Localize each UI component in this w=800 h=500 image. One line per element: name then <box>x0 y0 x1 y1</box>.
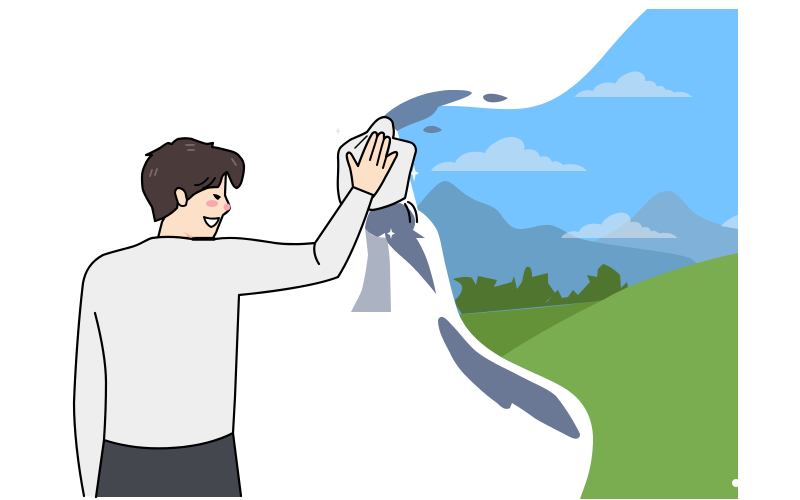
trouser side lines <box>96 433 241 496</box>
sleeve inner line <box>95 313 106 440</box>
hair fringe lines <box>195 178 215 188</box>
cloud: small overlapping mountain <box>561 213 677 238</box>
motion lines <box>405 202 417 222</box>
sky <box>380 9 738 499</box>
neck and face <box>158 170 230 238</box>
white dot <box>732 479 740 487</box>
hill: dark green <box>459 300 602 364</box>
cheek blush <box>206 200 218 207</box>
mouth <box>204 217 219 227</box>
ear <box>175 188 187 206</box>
cloud: upper right <box>575 71 692 97</box>
cloud: far right <box>721 215 738 229</box>
splash: grey drip <box>351 228 391 312</box>
sweater <box>74 187 373 497</box>
hill: light green <box>500 253 738 499</box>
trousers <box>96 433 241 497</box>
hand <box>347 132 397 197</box>
splash: small blob upper <box>483 94 508 102</box>
cloud: large <box>431 137 587 171</box>
elbow crease <box>314 243 319 264</box>
collar <box>193 237 214 241</box>
hair highlights <box>150 145 236 176</box>
sparkle: faint <box>335 127 341 135</box>
splash: dark streak under cloth <box>365 203 436 294</box>
splash: lower streak <box>438 317 580 439</box>
mountain: front range <box>410 181 705 320</box>
person <box>74 117 416 497</box>
finger lines <box>370 137 390 168</box>
panel: revealed landscape <box>380 9 738 499</box>
nose blush <box>224 204 230 210</box>
tree line <box>453 264 628 314</box>
cloth <box>338 117 416 210</box>
splash: top streak <box>383 90 472 131</box>
neck blush <box>183 231 197 238</box>
mountain: back range <box>594 191 738 264</box>
hair <box>142 138 244 221</box>
sparkle: right of cloth <box>409 165 419 182</box>
eye <box>213 194 221 200</box>
sparkle: on splash <box>387 228 395 239</box>
cloth fold <box>355 136 367 148</box>
splash: small blob lower <box>423 126 442 133</box>
